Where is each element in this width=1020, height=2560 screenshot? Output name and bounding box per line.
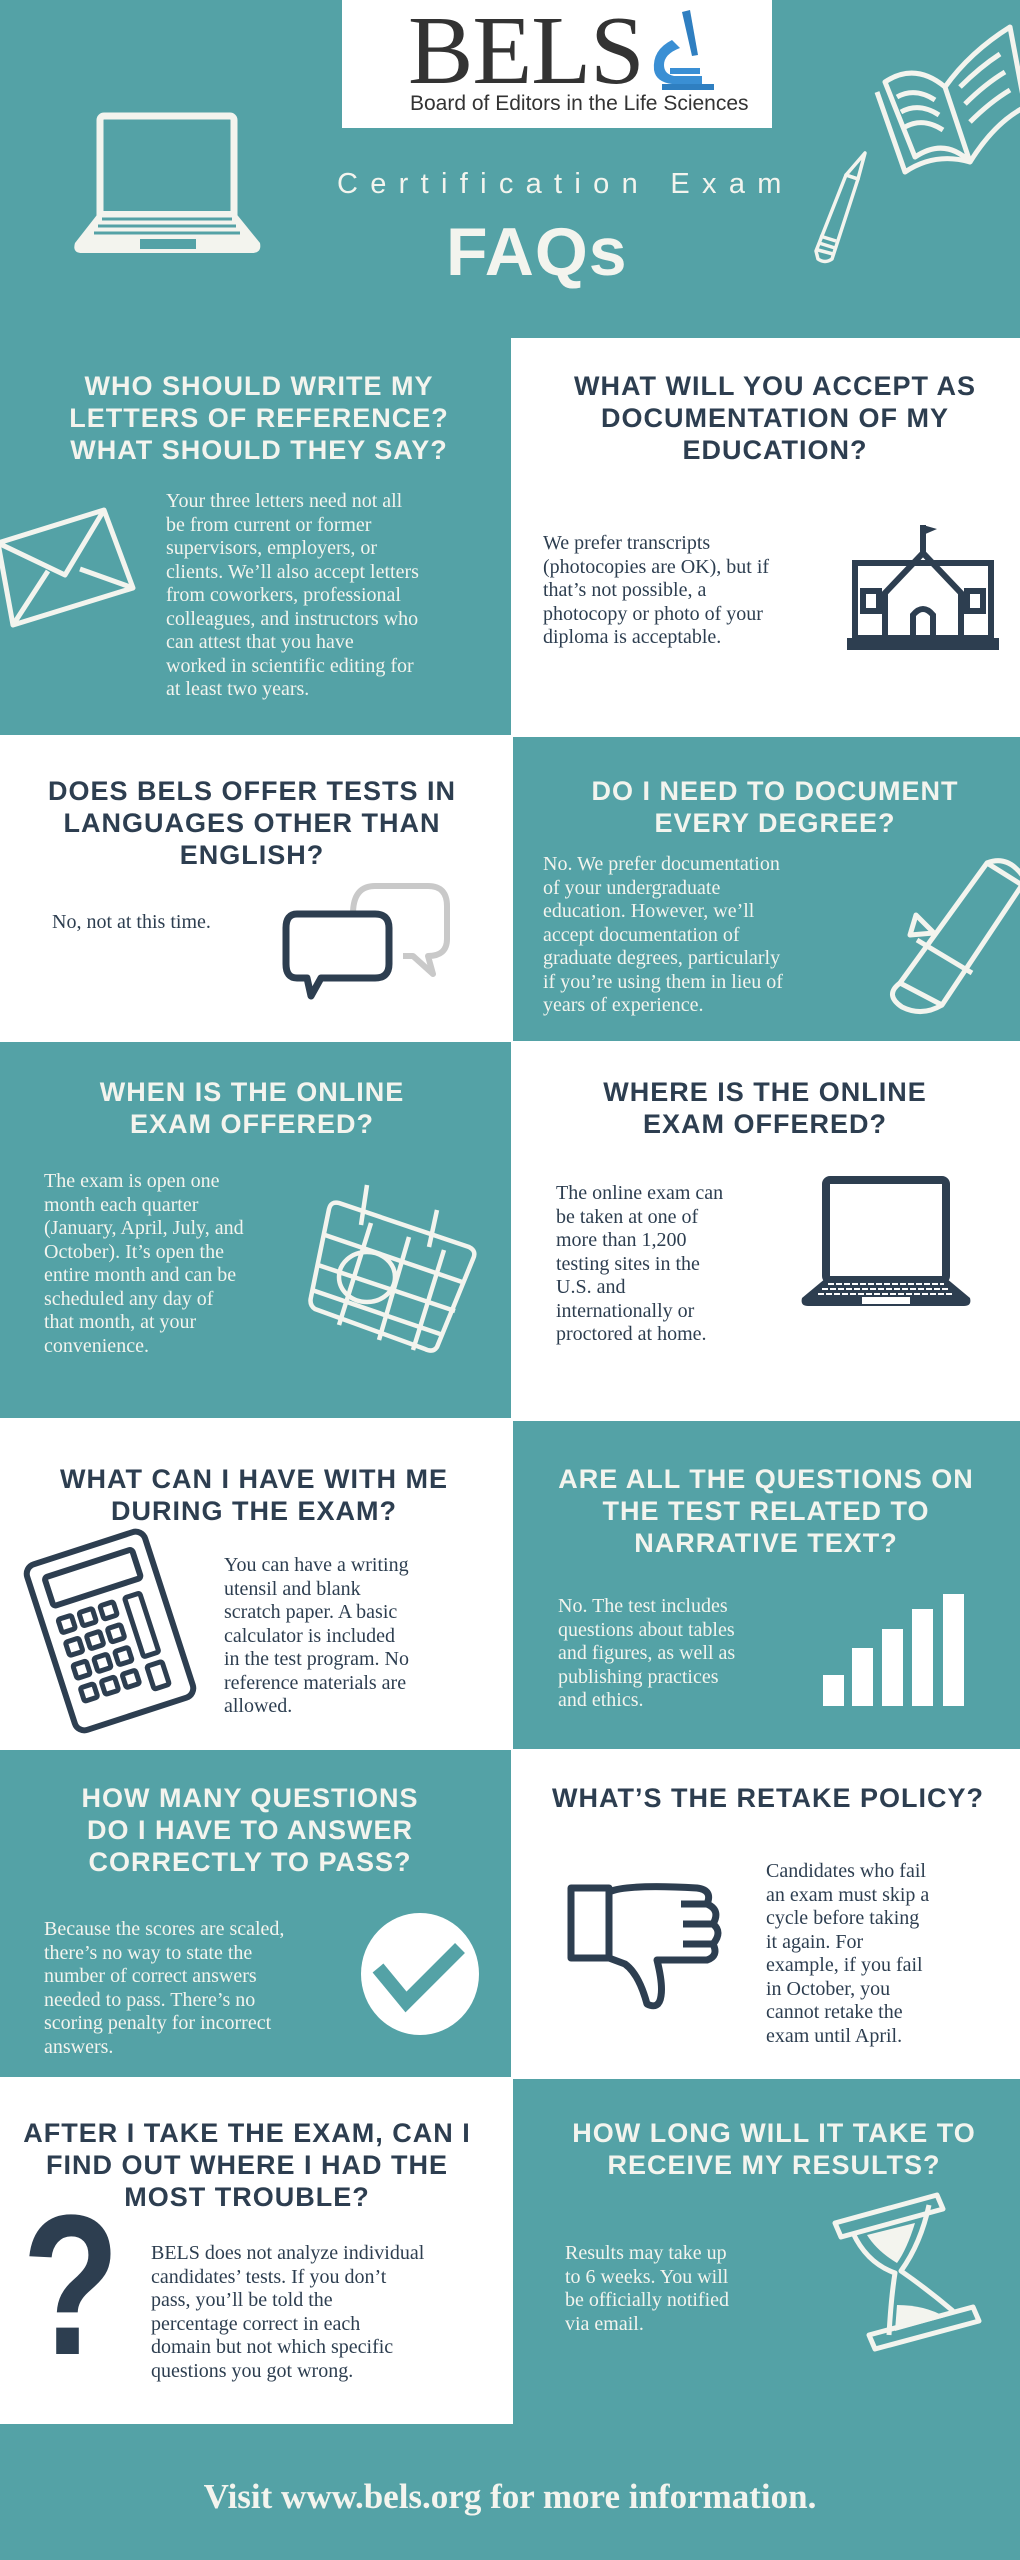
body text: Candidates who fail xyxy=(766,1860,926,1882)
body text: testing sites in the xyxy=(556,1252,700,1274)
heading: WHO SHOULD WRITE MY xyxy=(85,371,433,401)
title: FAQs: FAQs xyxy=(446,214,628,290)
heading: FIND OUT WHERE I HAD THE xyxy=(46,2150,448,2180)
heading: WHEN IS THE ONLINE xyxy=(100,1077,404,1107)
heading: WHAT SHOULD THEY SAY? xyxy=(70,435,448,465)
body text: more than 1,200 xyxy=(556,1229,687,1251)
panel: documentation of education xyxy=(543,371,999,650)
body text: can attest that you have xyxy=(166,631,354,653)
body text: No. The test includes xyxy=(558,1595,728,1617)
heading: HOW MANY QUESTIONS xyxy=(81,1783,419,1813)
heading: DOCUMENTATION OF MY xyxy=(601,403,949,433)
body text: cycle before taking xyxy=(766,1907,919,1929)
body text: We prefer transcripts xyxy=(543,532,710,554)
logo subtitle: Board of Editors in the Life Sciences xyxy=(410,92,749,115)
heading: DOES BELS OFFER TESTS IN xyxy=(48,776,456,806)
body text: example, if you fail xyxy=(766,1954,923,1976)
body text: Results may take up xyxy=(565,2242,727,2264)
panel: what can I have xyxy=(24,1464,448,1734)
body text: proctored at home. xyxy=(556,1323,706,1345)
body text: utensil and blank xyxy=(224,1578,361,1600)
body text: pass, you’ll be told the xyxy=(151,2289,333,2311)
body text: Your three letters need not all xyxy=(166,490,402,512)
body text: October). It’s open the xyxy=(44,1240,224,1262)
body text: that’s not possible, a xyxy=(543,579,706,601)
heading: AFTER I TAKE THE EXAM, CAN I xyxy=(23,2118,471,2148)
heading: LETTERS OF REFERENCE? xyxy=(69,403,449,433)
heading: NARRATIVE TEXT? xyxy=(634,1528,898,1558)
body text: percentage correct in each xyxy=(151,2312,360,2334)
body text: U.S. and xyxy=(556,1276,625,1298)
heading xyxy=(572,2117,976,2181)
body text: needed to pass. There’s no xyxy=(44,1988,255,2010)
body text xyxy=(224,1554,409,1717)
body text xyxy=(565,2242,729,2336)
heading: CORRECTLY TO PASS? xyxy=(88,1847,412,1877)
heading xyxy=(558,1464,974,1558)
body text: (January, April, July, and xyxy=(44,1217,244,1239)
icon: laptop outline xyxy=(74,112,260,253)
body text: internationally or xyxy=(556,1300,694,1322)
body text: No. We prefer documentation xyxy=(543,853,780,875)
icon: calendar xyxy=(308,1184,477,1353)
heading xyxy=(48,776,456,870)
heading: ENGLISH? xyxy=(180,840,324,870)
heading xyxy=(100,1077,404,1139)
body text: be from current or former xyxy=(166,514,371,536)
body text: colleagues, and instructors who xyxy=(166,608,418,630)
heading: EVERY DEGREE? xyxy=(654,808,896,838)
icon: pencil xyxy=(814,151,867,264)
body text: education. However, we’ll xyxy=(543,900,754,922)
heading: DO I HAVE TO ANSWER xyxy=(87,1815,413,1845)
icon: calculator xyxy=(24,1528,196,1734)
panel: how long results xyxy=(513,2079,1020,2560)
logo box xyxy=(342,0,772,128)
body text: years of experience. xyxy=(543,994,703,1016)
panel backgrounds row 1 left xyxy=(0,330,511,735)
icon: microscope xyxy=(654,10,714,90)
icon: thumbs down xyxy=(568,1883,722,2010)
icon: chat bubbles xyxy=(282,883,450,1000)
body text: that month, at your xyxy=(44,1311,196,1333)
body text: clients. We’ll also accept letters xyxy=(166,560,419,582)
icon: laptop xyxy=(802,1176,970,1306)
heading xyxy=(591,776,959,838)
heading xyxy=(574,371,976,465)
body text: scoring penalty for incorrect xyxy=(44,2012,271,2034)
body text: graduate degrees, particularly xyxy=(543,947,780,969)
body text: publishing practices xyxy=(558,1666,719,1688)
body text: supervisors, employers, or xyxy=(166,537,377,559)
body text: to 6 weeks. You will xyxy=(565,2266,728,2288)
heading: ARE ALL THE QUESTIONS ON xyxy=(558,1464,974,1494)
body text: there’s no way to state the xyxy=(44,1942,252,1964)
panel: languages xyxy=(48,776,456,1000)
body text: scheduled any day of xyxy=(44,1288,213,1310)
icon: diploma scroll xyxy=(890,858,1020,1014)
body text: (photocopies are OK), but if xyxy=(543,556,769,578)
icon: envelope xyxy=(0,508,136,628)
body text: Because the scores are scaled, xyxy=(44,1918,284,1940)
heading: EDUCATION? xyxy=(682,435,868,465)
heading xyxy=(81,1783,419,1877)
heading xyxy=(23,2118,471,2212)
panel: narrative text xyxy=(513,1421,1020,1749)
body text: in October, you xyxy=(766,1978,890,2000)
heading xyxy=(60,1464,448,1526)
body text: convenience. xyxy=(44,1334,149,1356)
body text: at least two years. xyxy=(166,678,309,700)
body text: exam until April. xyxy=(766,2024,902,2046)
body text: from coworkers, professional xyxy=(166,584,401,606)
body text: answers. xyxy=(44,2036,113,2058)
body text: of your undergraduate xyxy=(543,876,720,898)
body text: and figures, as well as xyxy=(558,1642,735,1664)
body text xyxy=(556,1182,723,1345)
body text: questions about tables xyxy=(558,1618,735,1640)
body text xyxy=(166,490,419,700)
panel: where is exam offered xyxy=(556,1077,970,1345)
body text: You can have a writing xyxy=(224,1554,409,1576)
heading: EXAM OFFERED? xyxy=(130,1109,374,1139)
subtitle: Certification Exam: Certification Exam xyxy=(337,168,794,200)
body text: via email. xyxy=(565,2312,644,2334)
body text: allowed. xyxy=(224,1695,292,1717)
icon: check mark circle xyxy=(361,1913,479,2035)
icon: open book xyxy=(874,24,1020,174)
body text xyxy=(766,1860,929,2046)
heading: DURING THE EXAM? xyxy=(111,1496,397,1526)
body text: month each quarter xyxy=(44,1194,198,1216)
footer background xyxy=(0,2424,1020,2560)
heading xyxy=(69,371,449,465)
body text: candidates’ tests. If you don’t xyxy=(151,2266,386,2288)
body text xyxy=(558,1595,735,1711)
body text xyxy=(44,1170,244,1356)
body text: The exam is open one xyxy=(44,1170,220,1192)
body text: calculator is included xyxy=(224,1624,395,1646)
footer text: Visit www.bels.org for more information. xyxy=(204,2477,816,2516)
body text: an exam must skip a xyxy=(766,1884,929,1906)
body text: if you’re using them in lieu of xyxy=(543,970,783,992)
panel: where I had most trouble xyxy=(22,2118,471,2397)
body text: The online exam can xyxy=(556,1182,723,1204)
heading: LANGUAGES OTHER THAN xyxy=(63,808,440,838)
panel: how many questions xyxy=(0,1750,511,2077)
heading: WHERE IS THE ONLINE xyxy=(603,1077,927,1107)
heading: MOST TROUBLE? xyxy=(124,2182,370,2212)
chart: bar icon xyxy=(823,1594,964,1706)
body text: reference materials are xyxy=(224,1672,406,1694)
body text: worked in scientific editing for xyxy=(166,654,414,676)
body text xyxy=(543,532,770,648)
icon: hourglass xyxy=(833,2193,981,2353)
body text: photocopy or photo of your xyxy=(543,602,763,624)
body text: be taken at one of xyxy=(556,1206,698,1228)
body text xyxy=(543,853,783,1016)
body text: cannot retake the xyxy=(766,2001,903,2023)
panel: reference letters xyxy=(0,371,449,700)
body text: number of correct answers xyxy=(44,1965,257,1987)
body text: and ethics. xyxy=(558,1689,644,1711)
heading: THE TEST RELATED TO xyxy=(602,1496,930,1526)
body text: entire month and can be xyxy=(44,1264,236,1286)
panel: document every degree xyxy=(513,737,1020,1041)
body text: No, not at this time. xyxy=(52,911,211,933)
body text: questions you got wrong. xyxy=(151,2360,353,2382)
panel: when is exam offered xyxy=(0,1042,511,1418)
body text: be officially notified xyxy=(565,2289,729,2311)
body text: BELS does not analyze individual xyxy=(151,2242,424,2264)
heading: EXAM OFFERED? xyxy=(643,1109,887,1139)
body text: it again. For xyxy=(766,1930,863,1952)
panel: retake policy xyxy=(552,1783,984,2046)
heading: WHAT CAN I HAVE WITH ME xyxy=(60,1464,448,1494)
body text: diploma is acceptable. xyxy=(543,626,721,648)
heading: RECEIVE MY RESULTS? xyxy=(607,2150,941,2180)
header background xyxy=(0,0,1020,338)
body text: scratch paper. A basic xyxy=(224,1601,397,1623)
body text xyxy=(44,1918,284,2058)
heading xyxy=(603,1077,927,1139)
body text: domain but not which specific xyxy=(151,2336,393,2358)
logo wordmark: BELS xyxy=(408,0,644,105)
icon: question mark: ? xyxy=(22,2174,120,2397)
body text: accept documentation of xyxy=(543,924,740,946)
heading: WHAT’S THE RETAKE POLICY? xyxy=(552,1783,984,1813)
body text xyxy=(151,2242,424,2383)
heading: DO I NEED TO DOCUMENT xyxy=(591,776,959,806)
icon: school building xyxy=(847,525,999,650)
heading: HOW LONG WILL IT TAKE TO xyxy=(572,2118,976,2148)
heading: WHAT WILL YOU ACCEPT AS xyxy=(574,371,976,401)
body text: in the test program. No xyxy=(224,1648,409,1670)
